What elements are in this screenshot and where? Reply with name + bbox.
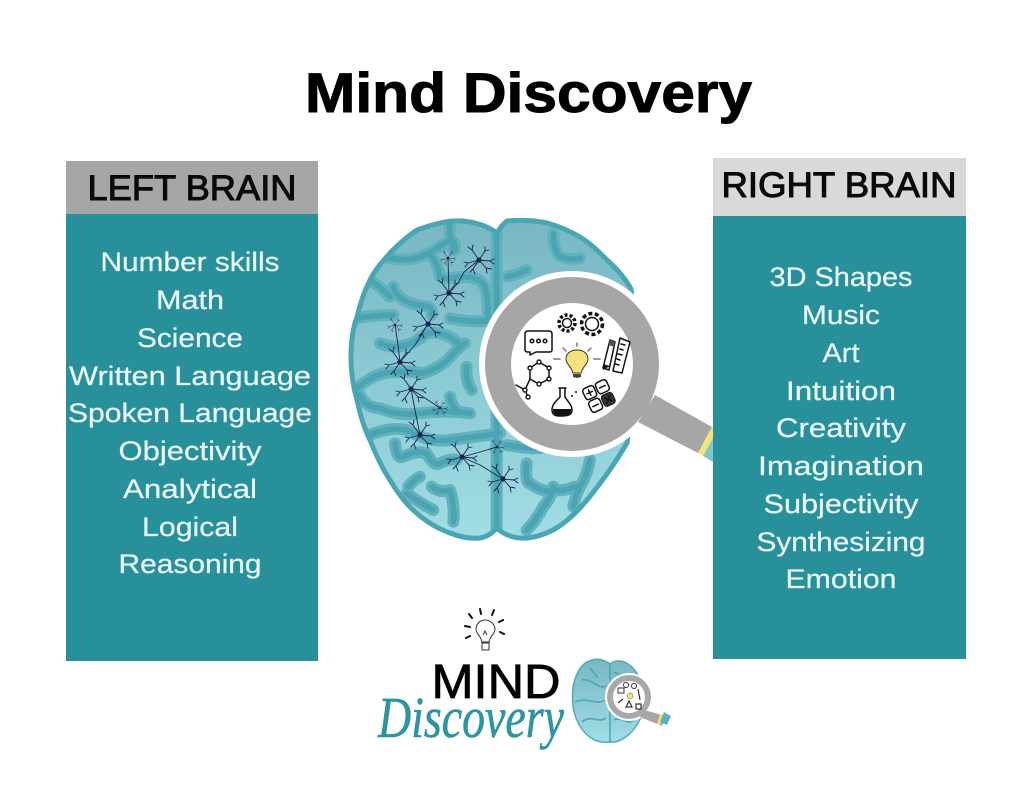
icon: gears [559, 314, 602, 334]
neurons [385, 245, 518, 493]
logo brain [572, 659, 671, 742]
logo [377, 609, 671, 750]
right brain list: Creativity [776, 413, 907, 443]
left brain list: Math [156, 285, 224, 315]
panel: right brain [713, 158, 966, 659]
brain illustration [351, 220, 713, 538]
left brain list [68, 247, 312, 579]
left brain list: Science [137, 323, 243, 353]
left brain list: Analytical [123, 474, 257, 504]
brain shape [351, 220, 640, 538]
icon: molecule [516, 360, 551, 399]
right brain list: Music [802, 300, 880, 330]
right brain list: Imagination [758, 451, 924, 481]
right brain header: RIGHT BRAIN [722, 166, 956, 205]
left brain list: Written Language [69, 361, 311, 391]
logo wordmark Discovery: Discovery [377, 685, 564, 750]
left brain header [66, 161, 318, 214]
right brain list: Synthesizing [756, 527, 926, 557]
right brain list: Intuition [786, 376, 896, 406]
left brain list: Spoken Language [68, 398, 312, 428]
icon: calculator keys [582, 379, 616, 413]
title: Mind Discovery [305, 61, 752, 124]
icon: light bulb [554, 343, 600, 378]
icon: pencil and ruler [603, 338, 630, 373]
icon: speech bubble [525, 331, 552, 355]
right brain list: Art [822, 338, 860, 368]
right brain list: Emotion [786, 564, 896, 594]
right brain header [713, 158, 966, 216]
panel: left brain [66, 161, 318, 661]
logo light bulb [465, 609, 504, 650]
brain folds [357, 220, 590, 530]
logo wordmark MIND: MIND [432, 656, 560, 709]
icon: flask [552, 388, 577, 416]
left brain list: Number skills [100, 247, 280, 277]
left brain list: Logical [142, 512, 238, 542]
left brain list: Objectivity [118, 436, 262, 466]
right brain list: 3D Shapes [770, 262, 912, 292]
magnifying glass [479, 271, 713, 462]
right brain list [756, 262, 926, 594]
left brain header: LEFT BRAIN [88, 169, 296, 208]
brain outline [351, 220, 640, 538]
right brain list: Subjectivity [764, 489, 919, 519]
left brain list: Reasoning [118, 549, 262, 579]
